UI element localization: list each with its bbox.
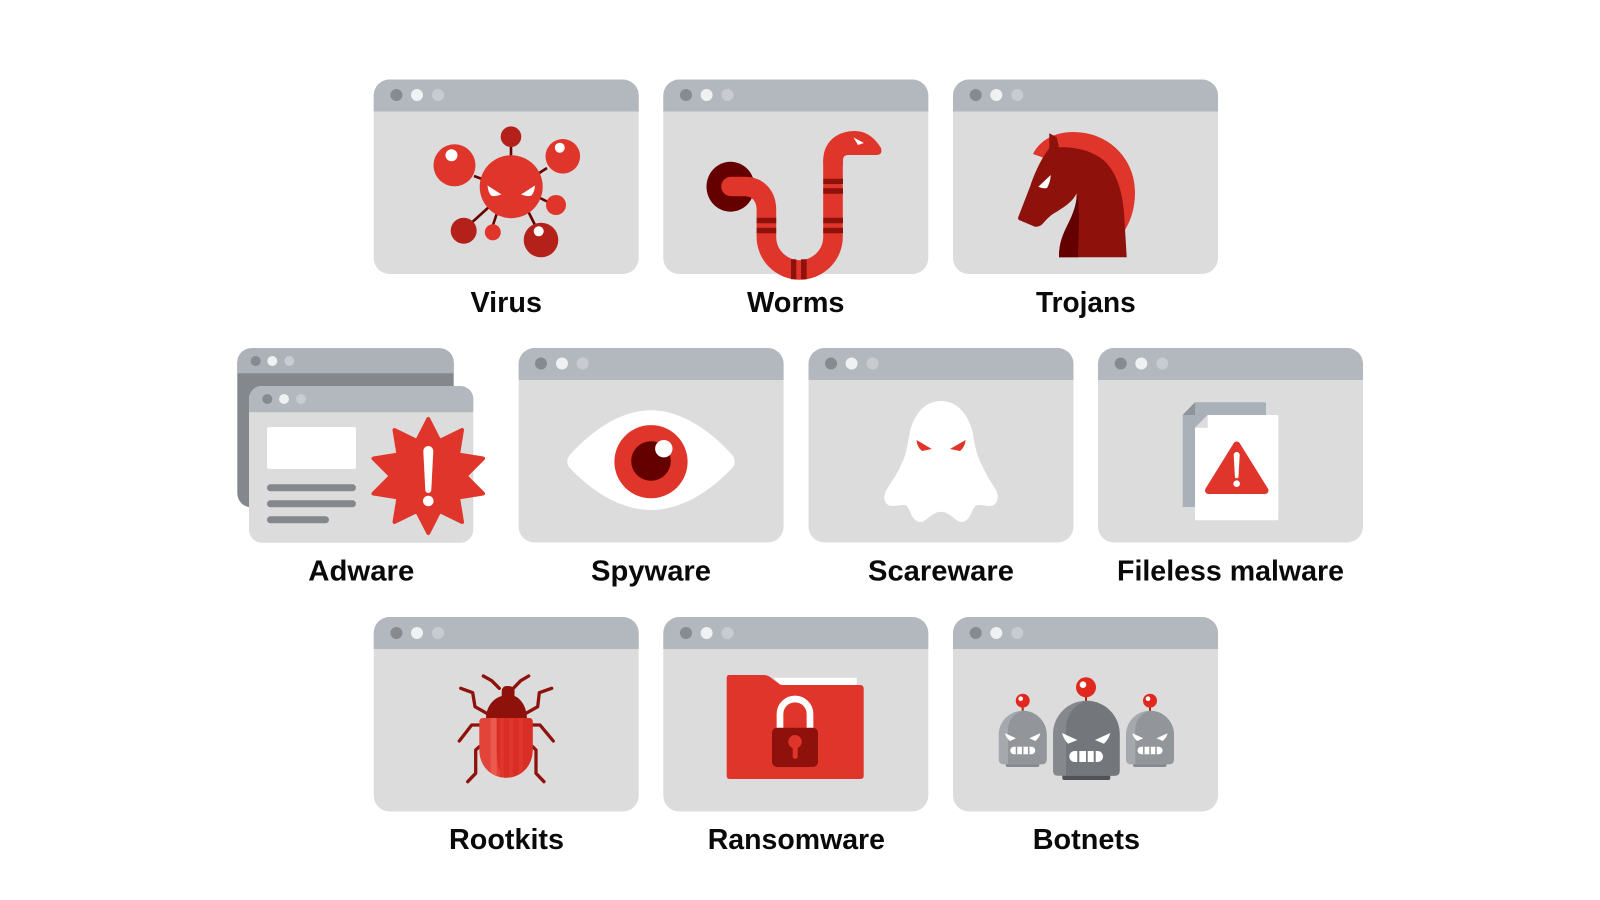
window: virus bbox=[374, 80, 639, 274]
window: botnets bbox=[953, 617, 1218, 812]
icon: eye bbox=[567, 410, 735, 510]
panel: spyware bbox=[519, 348, 784, 588]
icon: worm bbox=[706, 131, 881, 279]
panel: fileless malware bbox=[1098, 348, 1363, 588]
window: spyware bbox=[519, 348, 784, 542]
window: rootkits bbox=[374, 617, 639, 812]
icon: right robot bbox=[1126, 694, 1174, 767]
window: ransomware bbox=[663, 617, 928, 812]
label: Adware: Adware bbox=[308, 556, 414, 588]
label: Trojans: Trojans bbox=[1036, 287, 1136, 319]
window: worms bbox=[663, 80, 928, 274]
window: adware front bbox=[249, 386, 473, 543]
label: Rootkits: Rootkits bbox=[449, 824, 564, 856]
panel: virus bbox=[374, 80, 639, 319]
label: Virus: Virus bbox=[470, 287, 542, 319]
label: Scareware: Scareware bbox=[868, 556, 1014, 588]
window: adware back bbox=[237, 348, 454, 507]
window: trojans bbox=[953, 80, 1218, 274]
infographic: types of malware bbox=[237, 80, 1363, 850]
panel: scareware bbox=[808, 348, 1074, 588]
label: Botnets: Botnets bbox=[1033, 824, 1140, 856]
label: Spyware: Spyware bbox=[591, 556, 711, 588]
panel: worms bbox=[663, 80, 928, 319]
icon: beetle bbox=[459, 676, 553, 782]
panel: rootkits bbox=[374, 617, 639, 856]
icon: locked folder bbox=[727, 675, 864, 779]
panel: botnets bbox=[953, 617, 1218, 856]
window: scareware bbox=[808, 348, 1074, 542]
panel: ransomware bbox=[663, 617, 928, 856]
icon: alert burst bbox=[374, 419, 483, 533]
label: Fileless malware: Fileless malware bbox=[1117, 556, 1344, 588]
label: Worms: Worms bbox=[747, 287, 844, 319]
icon: ghost bbox=[884, 401, 998, 522]
icon: left robot bbox=[999, 694, 1047, 767]
panel: trojans bbox=[953, 80, 1218, 319]
panel: adware bbox=[237, 348, 483, 588]
label: Ransomware: Ransomware bbox=[708, 824, 885, 856]
icon: center robot bbox=[1053, 677, 1120, 780]
window: fileless malware bbox=[1098, 348, 1363, 542]
icon: file warning bbox=[1183, 402, 1278, 520]
icon: virus bbox=[434, 126, 580, 257]
icon: trojan horse bbox=[1018, 132, 1135, 257]
